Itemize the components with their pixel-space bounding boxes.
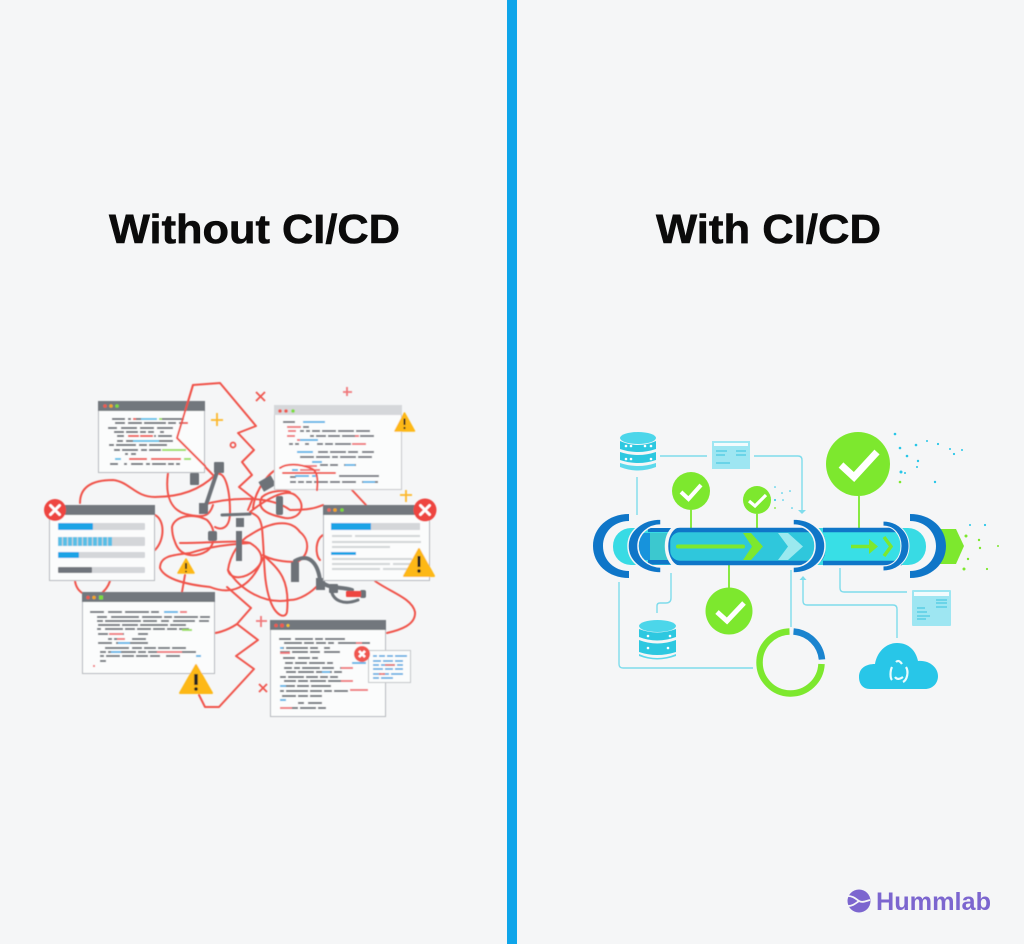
icon: warning right window	[404, 549, 434, 576]
icon: warning center	[178, 559, 194, 573]
logo wordmark: Hummlab	[876, 888, 991, 916]
flow arrows	[678, 533, 891, 560]
logo: Hummlab	[848, 888, 991, 916]
popup dialog	[368, 650, 410, 682]
connector plug	[346, 591, 361, 597]
window: bottom right code editor	[270, 620, 386, 716]
arrowheads	[798, 510, 806, 580]
icon: top dashboard card	[712, 441, 750, 469]
green stems	[691, 496, 859, 590]
icon: left error badge	[44, 499, 66, 521]
thin connector lines	[619, 456, 907, 668]
decorative plus and cross marks	[211, 387, 412, 692]
icon: right error badge	[414, 498, 436, 522]
icon: progress ring	[760, 632, 822, 693]
icon: warning bottom	[180, 665, 212, 693]
window: left progress bars	[49, 505, 155, 580]
pipeline tube	[593, 514, 964, 578]
red tangled wires	[75, 383, 415, 707]
panel: clean CI/CD pipeline illustration	[593, 432, 999, 693]
cyan particles	[774, 433, 986, 526]
arrow tail hexagon	[938, 529, 964, 564]
panel: tangled workflow illustration	[44, 383, 436, 716]
icon: lower check badge	[706, 588, 752, 634]
icon: warning top right	[395, 413, 414, 431]
heading: With CI/CD: With CI/CD	[656, 206, 881, 252]
icon: lower right dashboard card	[912, 590, 951, 626]
icon: top database	[620, 432, 656, 470]
wires crossing over upper windows	[177, 385, 335, 490]
window: top left code editor	[98, 401, 205, 472]
icon: cloud with sync symbol	[859, 643, 938, 689]
gray connectors	[206, 469, 358, 602]
icon: large check badge	[826, 432, 890, 496]
center divider	[507, 0, 517, 944]
window: top right code editor	[274, 405, 402, 490]
window: bottom left code editor	[82, 592, 215, 674]
icon: lower database	[639, 620, 676, 660]
green particles	[774, 481, 999, 570]
icon: popup error badge	[354, 646, 370, 662]
heading: Without CI/CD: Without CI/CD	[109, 206, 400, 252]
logo mark	[848, 890, 870, 912]
icon: medium check badge	[672, 472, 710, 510]
icon: small check badge	[743, 486, 771, 514]
window: right progress report	[323, 505, 430, 580]
